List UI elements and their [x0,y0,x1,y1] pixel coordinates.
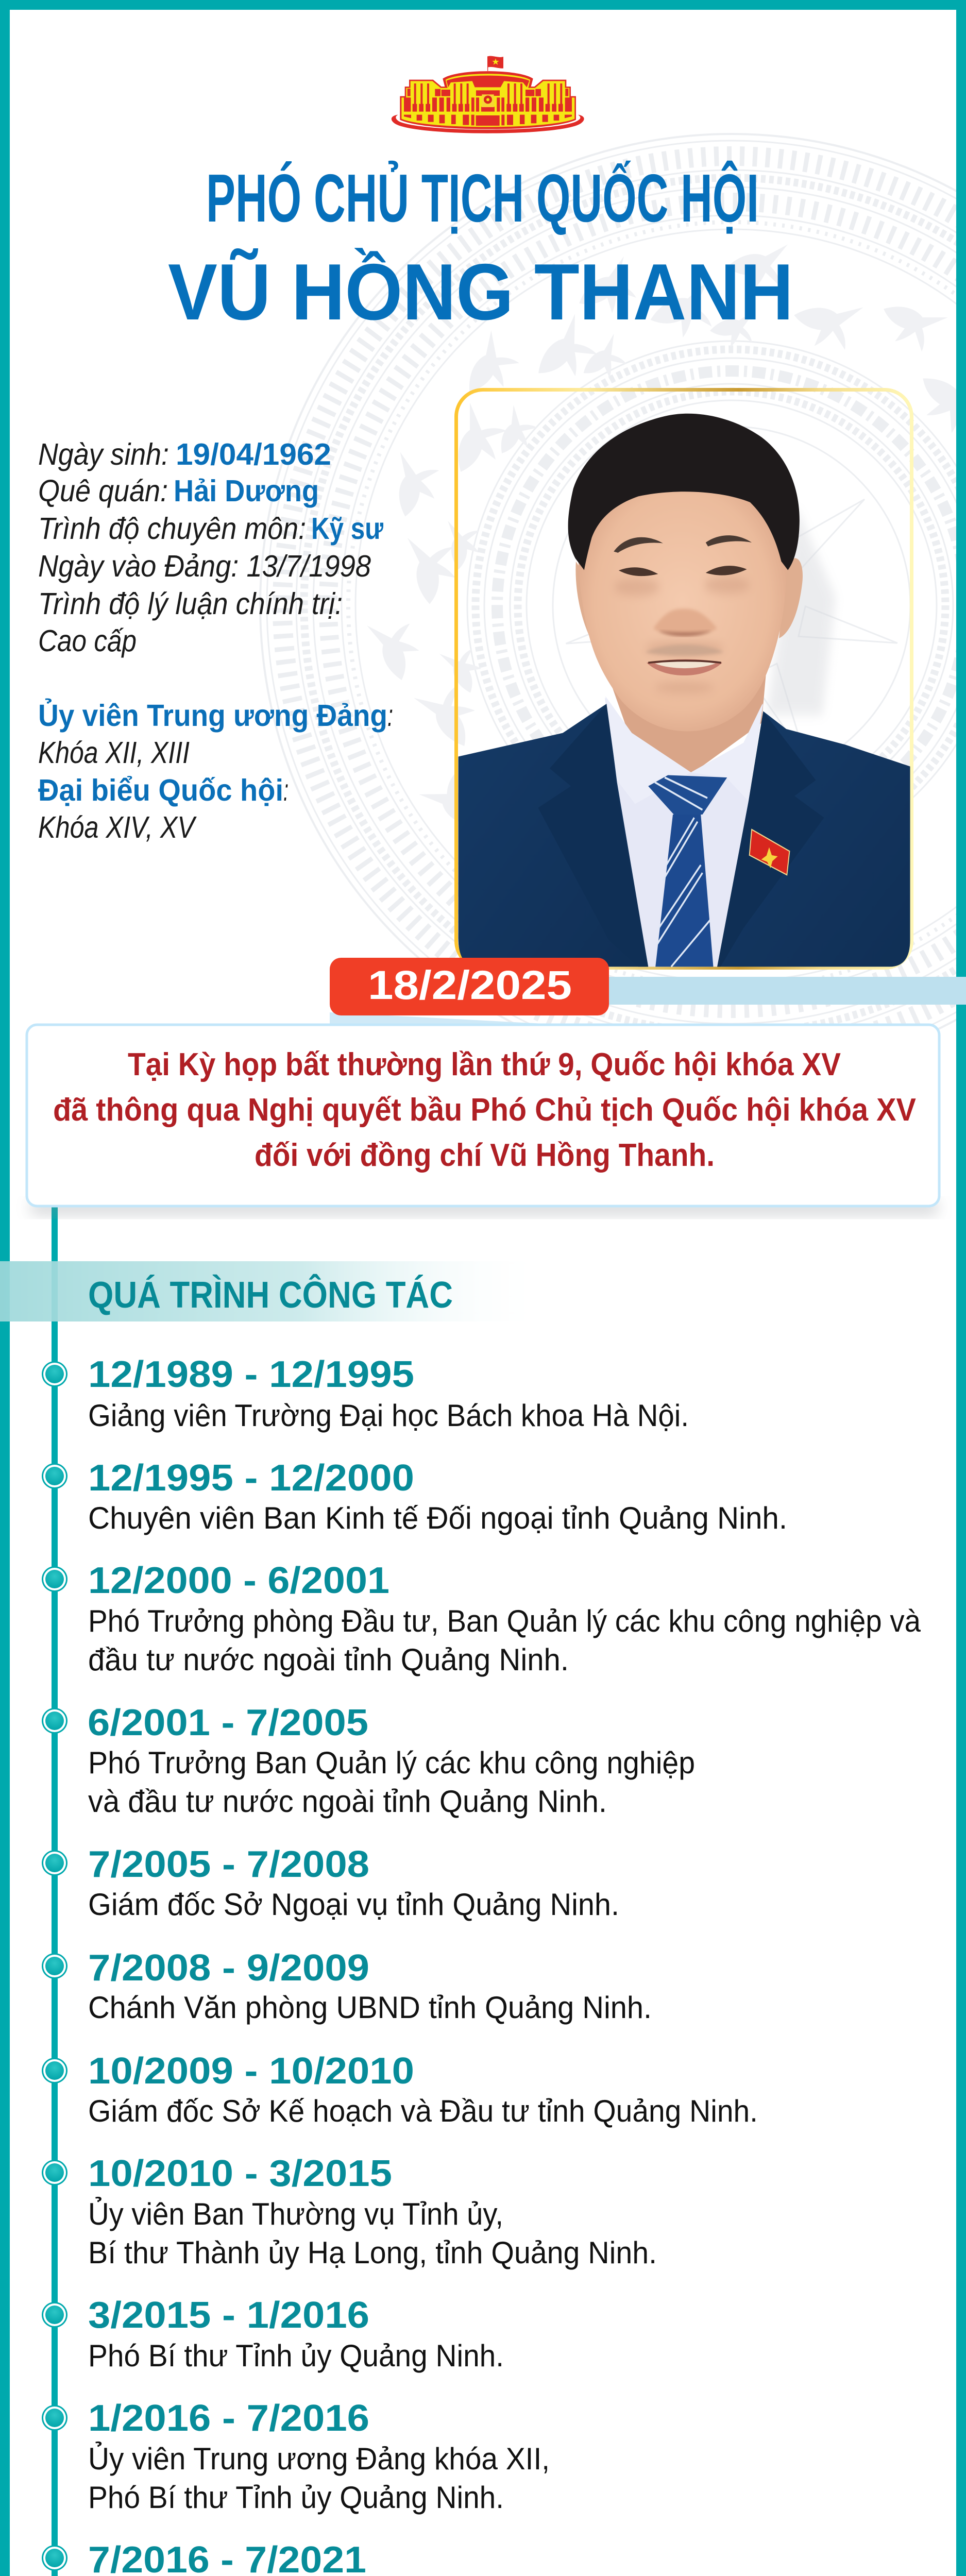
portrait [459,414,910,967]
description: và đầu tư nước ngoài tỉnh Quảng Ninh. [88,1784,607,1819]
face [578,470,787,731]
dot [42,2160,67,2185]
dot [42,2545,67,2571]
party date: Ngày vào Đảng: 13/7/1998 [38,549,371,583]
description: Phó Trưởng phòng Đầu tư, Ban Quản lý các khu công nghiệp và [88,1604,921,1638]
card shadow [31,1200,938,1215]
shirt [605,698,763,967]
timeline item: 12/2000 - 6/2001 [42,1560,921,1677]
announcement line 2: đã thông qua Nghị quyết bầu Phó Chủ tịch Quốc hội khóa XV [53,1092,916,1128]
birth date: Ngày sinh: [38,437,169,471]
date: 12/2000 - 6/2001 [88,1560,389,1601]
timeline item: 10/2009 - 10/2010 [42,2050,758,2128]
timeline item: 3/2015 - 1/2016 [42,2295,504,2373]
timeline item: 10/2010 - 3/2015 [42,2153,657,2270]
date badge: 18/2/2025 [368,962,572,1008]
description [88,2442,550,2515]
hair [568,414,800,570]
national assembly deputy: : [283,773,289,807]
suit [459,703,648,967]
date: 10/2009 - 10/2010 [88,2050,414,2092]
party pin [750,829,789,875]
description: Ủy viên Trung ương Đảng khóa XII, [88,2442,550,2476]
birth date: 19/04/1962 [176,437,331,471]
hometown: Hải Dương [174,474,319,508]
description: Ủy viên Ban Thường vụ Tỉnh ủy, [88,2197,503,2231]
date: 12/1989 - 12/1995 [88,1354,414,1395]
dot [42,2058,67,2083]
date: 12/1995 - 12/2000 [88,1458,414,1499]
national assembly deputy: Đại biểu Quốc hội [38,773,283,807]
central committee: : [387,699,393,733]
eyebrows [614,537,663,553]
flag [487,56,503,71]
degree: Trình độ chuyên môn: [38,512,306,546]
political theory level: Cao cấp [38,624,137,658]
birth date [38,437,331,471]
description: đầu tư nước ngoài tỉnh Quảng Ninh. [88,1642,569,1677]
timeline item: 7/2008 - 9/2009 [42,1947,652,2025]
political theory level: Trình độ lý luận chính trị: [38,587,343,621]
date: 7/2005 - 7/2008 [88,1844,369,1885]
dome [447,76,529,87]
timeline item: 6/2001 - 7/2005 [42,1702,695,1819]
description: Chuyên viên Ban Kinh tế Đối ngoại tỉnh Quảng Ninh. [88,1501,787,1535]
timeline item: 7/2005 - 7/2008 [42,1844,619,1922]
description [88,1745,695,1819]
nose [653,609,717,636]
description: Bí thư Thành ủy Hạ Long, tỉnh Quảng Ninh. [88,2235,657,2270]
logo: National Assembly building [392,56,584,133]
moustache area [645,645,724,656]
description: Chánh Văn phòng UBND tỉnh Quảng Ninh. [88,1990,652,2025]
announcement line 1: Tại Kỳ họp bất thường lần thứ 9, Quốc hội khóa XV [128,1047,841,1082]
dot [42,2302,67,2328]
title [168,160,793,336]
dot [42,1463,67,1489]
degree: Kỹ sư [311,512,383,546]
description: Giám đốc Sở Kế hoạch và Đầu tư tỉnh Quảng Ninh. [88,2094,758,2128]
date: 6/2001 - 7/2005 [88,1702,368,1743]
dot [42,1566,67,1592]
background: bronze drum watermark [260,134,966,1077]
dot [42,2405,67,2431]
eyes [619,567,658,576]
head shadow [767,506,836,715]
base crescent [392,115,584,133]
national assembly deputy [38,773,289,844]
description: Giám đốc Sở Ngoại vụ tỉnh Quảng Ninh. [88,1887,619,1922]
section heading band [0,1261,546,1321]
timeline line [52,1200,58,2576]
announcement card [27,1025,939,1206]
date: 3/2015 - 1/2016 [88,2295,369,2336]
dot [42,1361,67,1387]
description [88,2197,657,2270]
hometown: Quê quán: [38,474,168,508]
section heading band: QUÁ TRÌNH CÔNG TÁC [88,1274,453,1316]
timeline item: 12/1989 - 12/1995 [42,1354,689,1433]
building body [400,71,576,129]
dot [42,1953,67,1979]
description: Phó Bí thư Tỉnh ủy Quảng Ninh. [88,2480,504,2515]
date badge [330,958,609,1015]
date: 7/2008 - 9/2009 [88,1947,369,1989]
ears [575,562,599,642]
date strip [609,977,966,1005]
central committee [38,698,393,770]
lapels [538,703,648,967]
central committee: Ủy viên Trung ương Đảng [38,698,387,733]
portrait frame [456,389,912,968]
hometown [38,474,319,508]
title line 2: VŨ HỒNG THANH [168,247,793,336]
political theory level [38,587,343,658]
central committee: Khóa XII, XIII [38,736,190,770]
dot [42,1708,67,1734]
description [88,1604,921,1677]
dot [42,1850,67,1876]
national assembly deputy: Khóa XIV, XV [38,810,197,844]
date: 10/2010 - 3/2015 [88,2153,392,2194]
personal info [38,437,393,844]
emblem [482,94,494,107]
collar [605,696,691,804]
timeline item: 12/1995 - 12/2000 [42,1458,787,1535]
face shading [614,577,750,693]
description: Phó Trưởng Ban Quản lý các khu công nghiệp [88,1745,695,1780]
description: Giảng viên Trường Đại học Bách khoa Hà Nội. [88,1398,689,1433]
tie [648,775,727,967]
mouth [647,659,722,675]
description: Phó Bí thư Tỉnh ủy Quảng Ninh. [88,2338,504,2373]
announcement line 3: đối với đồng chí Vũ Hồng Thanh. [255,1138,715,1173]
shadow under date badge [330,1012,592,1026]
timeline item: 7/2016 - 7/2021 [42,2539,833,2576]
neck [605,668,767,774]
windows upper [404,83,572,126]
date: 1/2016 - 7/2016 [88,2398,369,2439]
timeline item: 1/2016 - 7/2016 [42,2398,550,2515]
